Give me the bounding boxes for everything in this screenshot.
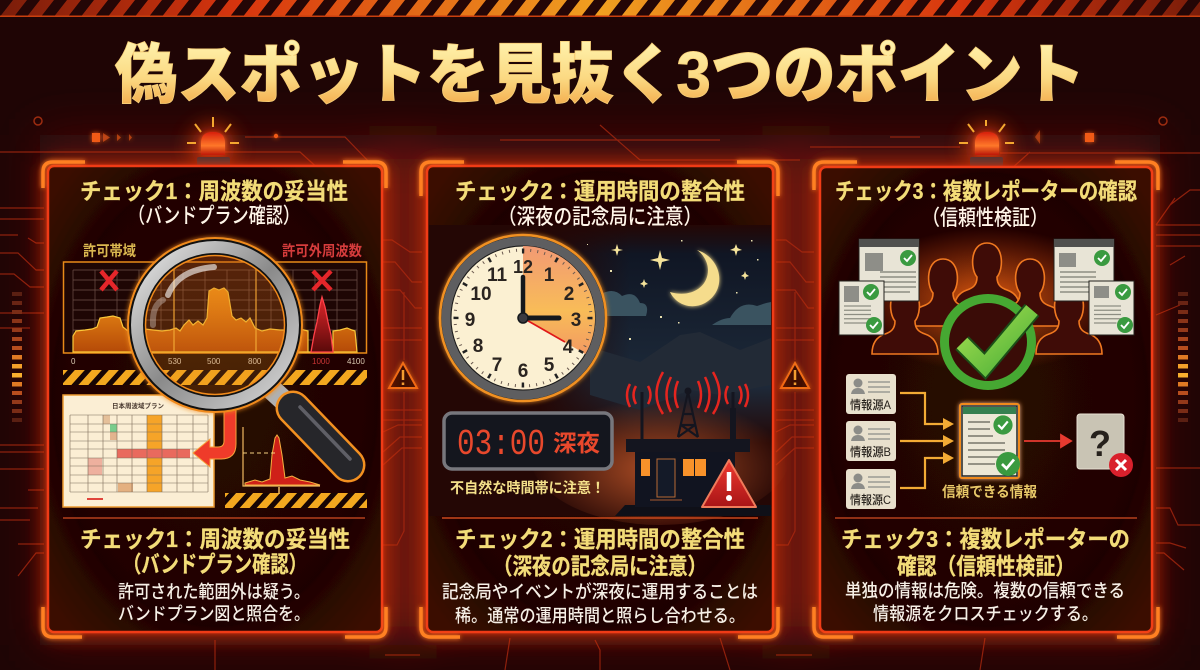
bottom heading 2: チェック2：運用時間の整合性: [455, 526, 745, 552]
clock numerals: [465, 257, 581, 382]
digital display: 03:00: [457, 424, 545, 465]
digital display: 深夜: [553, 430, 600, 456]
magnifying glass: [128, 238, 350, 465]
body 3 line 2: 情報源をクロスチェックする。: [873, 604, 1098, 624]
question card: ?: [1089, 423, 1111, 464]
title: 偽スポットを見抜く3つのポイント: [115, 38, 1085, 111]
axis labels: [71, 357, 365, 366]
panel 1: frequency check: [43, 162, 386, 637]
source A: [846, 374, 896, 414]
bottom heading 1: チェック1：周波数の妥当性: [80, 526, 350, 552]
source B: 情報源B: [850, 444, 891, 459]
red arrow: [1024, 435, 1071, 447]
frame 3: [814, 162, 1158, 637]
axis labels: 0: [71, 357, 76, 366]
bottom subheading 2: （深夜の記念局に注意）: [493, 553, 707, 579]
body 1 line 2: バンドプラン図と照合を。: [118, 604, 310, 624]
LED bar right: [1178, 292, 1188, 422]
divider 2: [442, 517, 758, 519]
heading 2: チェック2：運用時間の整合性: [455, 178, 745, 204]
mini spectrum: [243, 427, 320, 494]
clock numerals: 12: [513, 257, 533, 277]
panel 3: multiple reporters check: [814, 162, 1158, 637]
spectrum chart: [64, 262, 366, 353]
digital display: [444, 413, 612, 469]
bottom subheading 3: 確認（信頼性検証）: [897, 553, 1075, 579]
clock numerals: 8: [473, 336, 483, 357]
axis labels: 800: [248, 357, 262, 366]
side warning icon right: [781, 363, 809, 388]
heading 1: チェック1：周波数の妥当性: [80, 178, 348, 204]
source C: [846, 469, 896, 509]
report cards right: [1054, 239, 1134, 335]
station with antennas: [615, 372, 771, 516]
stars: [611, 244, 749, 288]
clock numerals: 9: [465, 310, 475, 331]
big check mark: [944, 298, 1032, 386]
label: allowed band: 許可帯域: [83, 243, 136, 260]
people group: [852, 228, 1122, 372]
source B: [846, 421, 896, 461]
label: out of band: 許可外周波数: [282, 242, 362, 260]
top hazard stripe: [0, 0, 1200, 17]
body 1 line 1: 許可された範囲外は疑う。: [118, 582, 310, 602]
clock numerals: 11: [487, 265, 507, 286]
clock: [440, 235, 606, 401]
frame 2: [421, 162, 778, 637]
heading 3: チェック3：複数レポーターの確認: [835, 178, 1137, 204]
clock numerals: 6: [518, 361, 528, 382]
bottom heading 3: チェック3：複数レポーターの: [841, 526, 1130, 552]
small indicators: [92, 130, 1094, 144]
ambient glow: [40, 135, 1160, 645]
subheading 3: （信頼性検証）: [922, 206, 1048, 230]
red pointer arrow: [193, 410, 236, 467]
signal waves: [627, 372, 748, 414]
source A: 情報源A: [850, 397, 891, 412]
clock numerals: 2: [564, 284, 574, 305]
axis labels: 1000: [312, 357, 330, 366]
side warning icon left: [389, 363, 417, 388]
beacon left: [187, 117, 239, 169]
subheading 1: （バンドプラン確認）: [128, 204, 300, 228]
trusted document: [960, 404, 1020, 478]
converging arrows: [900, 393, 954, 488]
bottom subheading 1: （バンドプラン確認）: [123, 551, 307, 577]
clock numerals: 1: [544, 265, 555, 286]
band plan document: 日本周波域プラン: [112, 401, 164, 410]
clock numerals: 10: [470, 284, 492, 305]
beacon right: [959, 120, 1014, 169]
caption: 不自然な時間帯に注意！: [450, 479, 605, 497]
question card: [1077, 414, 1133, 477]
hazard strip lower: [225, 493, 367, 508]
trusted caption: 信頼できる情報: [942, 483, 1037, 501]
divider 3: [835, 517, 1137, 519]
body 2 line 2: 稀。通常の運用時間と照らし合わせる。: [455, 606, 745, 626]
divider 1: [63, 517, 365, 519]
axis labels: 4100: [347, 357, 365, 366]
body 2 line 1: 記念局やイベントが深夜に運用することは: [442, 581, 758, 602]
body 3 line 1: 単独の情報は危険。複数の信頼できる: [845, 581, 1125, 601]
subheading 2: （深夜の記念局に注意）: [498, 205, 702, 229]
band plan document: [63, 395, 214, 507]
clock numerals: 5: [544, 355, 555, 376]
warning triangle: [702, 460, 756, 507]
clock numerals: 4: [563, 337, 574, 358]
frame 1: [43, 162, 386, 637]
source C: 情報源C: [850, 492, 891, 507]
axis labels: 500: [207, 357, 221, 366]
moon: [670, 250, 719, 306]
clock numerals: 7: [492, 355, 502, 376]
axis labels: 530: [168, 357, 182, 366]
clock numerals: 3: [571, 310, 581, 331]
report cards left: [839, 239, 919, 335]
night scene: [429, 225, 790, 525]
LED bar left: [12, 292, 22, 422]
panel 2: operating time check: [421, 162, 790, 637]
header rule: [34, 117, 1167, 125]
hazard strip upper: [63, 370, 367, 385]
